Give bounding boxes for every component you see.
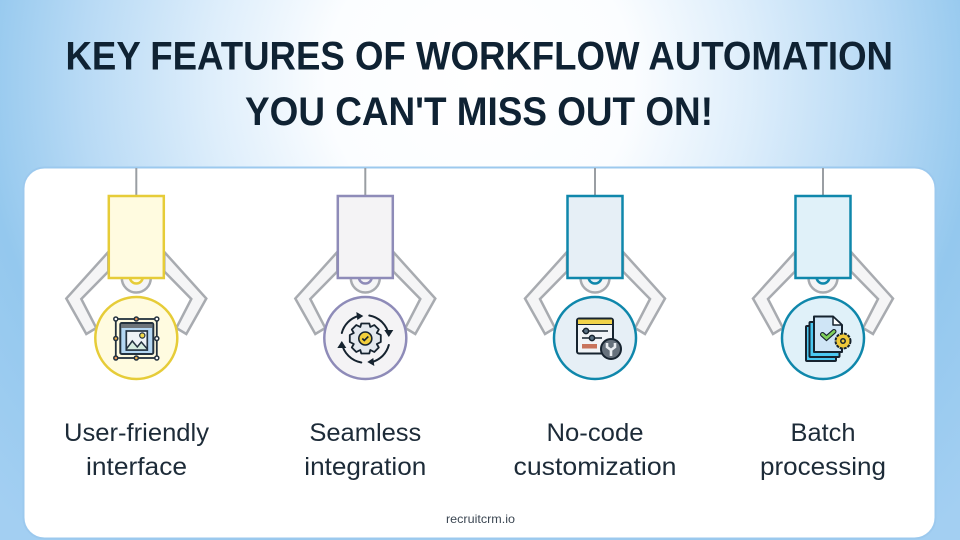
joint inner [816, 270, 830, 284]
gripper body [796, 196, 850, 278]
feature: no-code customization [514, 168, 676, 481]
gripper joint [122, 264, 151, 292]
gripper claws [753, 252, 893, 334]
cable [822, 168, 824, 196]
label: User-friendly [64, 419, 210, 447]
joint inner [130, 270, 143, 284]
label: interface [86, 453, 187, 481]
cable [135, 168, 137, 196]
label [304, 419, 426, 481]
joint inner [359, 270, 372, 284]
gripper body [109, 196, 164, 278]
footer brand: recruitcrm.io [446, 512, 515, 526]
title: KEY FEATURES OF WORKFLOW AUTOMATION [66, 34, 893, 78]
gripper body [568, 196, 622, 278]
label: processing [760, 453, 886, 481]
gripper claws [295, 252, 435, 334]
icon circle [324, 297, 406, 379]
gripper claws [525, 252, 665, 334]
icon circle [95, 297, 177, 379]
joint inner [588, 270, 602, 284]
title: YOU CAN'T MISS OUT ON! [245, 90, 713, 134]
gripper joint [808, 264, 838, 292]
title [66, 34, 893, 134]
label: Seamless [309, 419, 421, 447]
gripper joint [580, 264, 610, 292]
label: customization [514, 453, 676, 481]
icon: image editor frame [114, 317, 159, 360]
label [514, 419, 676, 481]
label: integration [304, 453, 426, 481]
cable [594, 168, 596, 196]
label [64, 419, 210, 481]
label: Batch [790, 419, 856, 447]
gripper body [338, 196, 393, 278]
icon circle [554, 297, 636, 379]
icon circle [782, 297, 864, 379]
panel: features card [24, 168, 936, 538]
feature: seamless integration [295, 168, 435, 481]
icon: settings window with wrench [577, 318, 621, 359]
gripper joint [351, 264, 380, 292]
feature: batch processing [753, 168, 893, 481]
label: No-code [546, 419, 644, 447]
label [760, 419, 886, 481]
icon: gear with cycle arrows [337, 312, 393, 366]
gripper claws [66, 252, 206, 334]
icon: document stack with badge [806, 316, 850, 361]
feature: user-friendly interface [64, 168, 210, 481]
cable [364, 168, 366, 196]
